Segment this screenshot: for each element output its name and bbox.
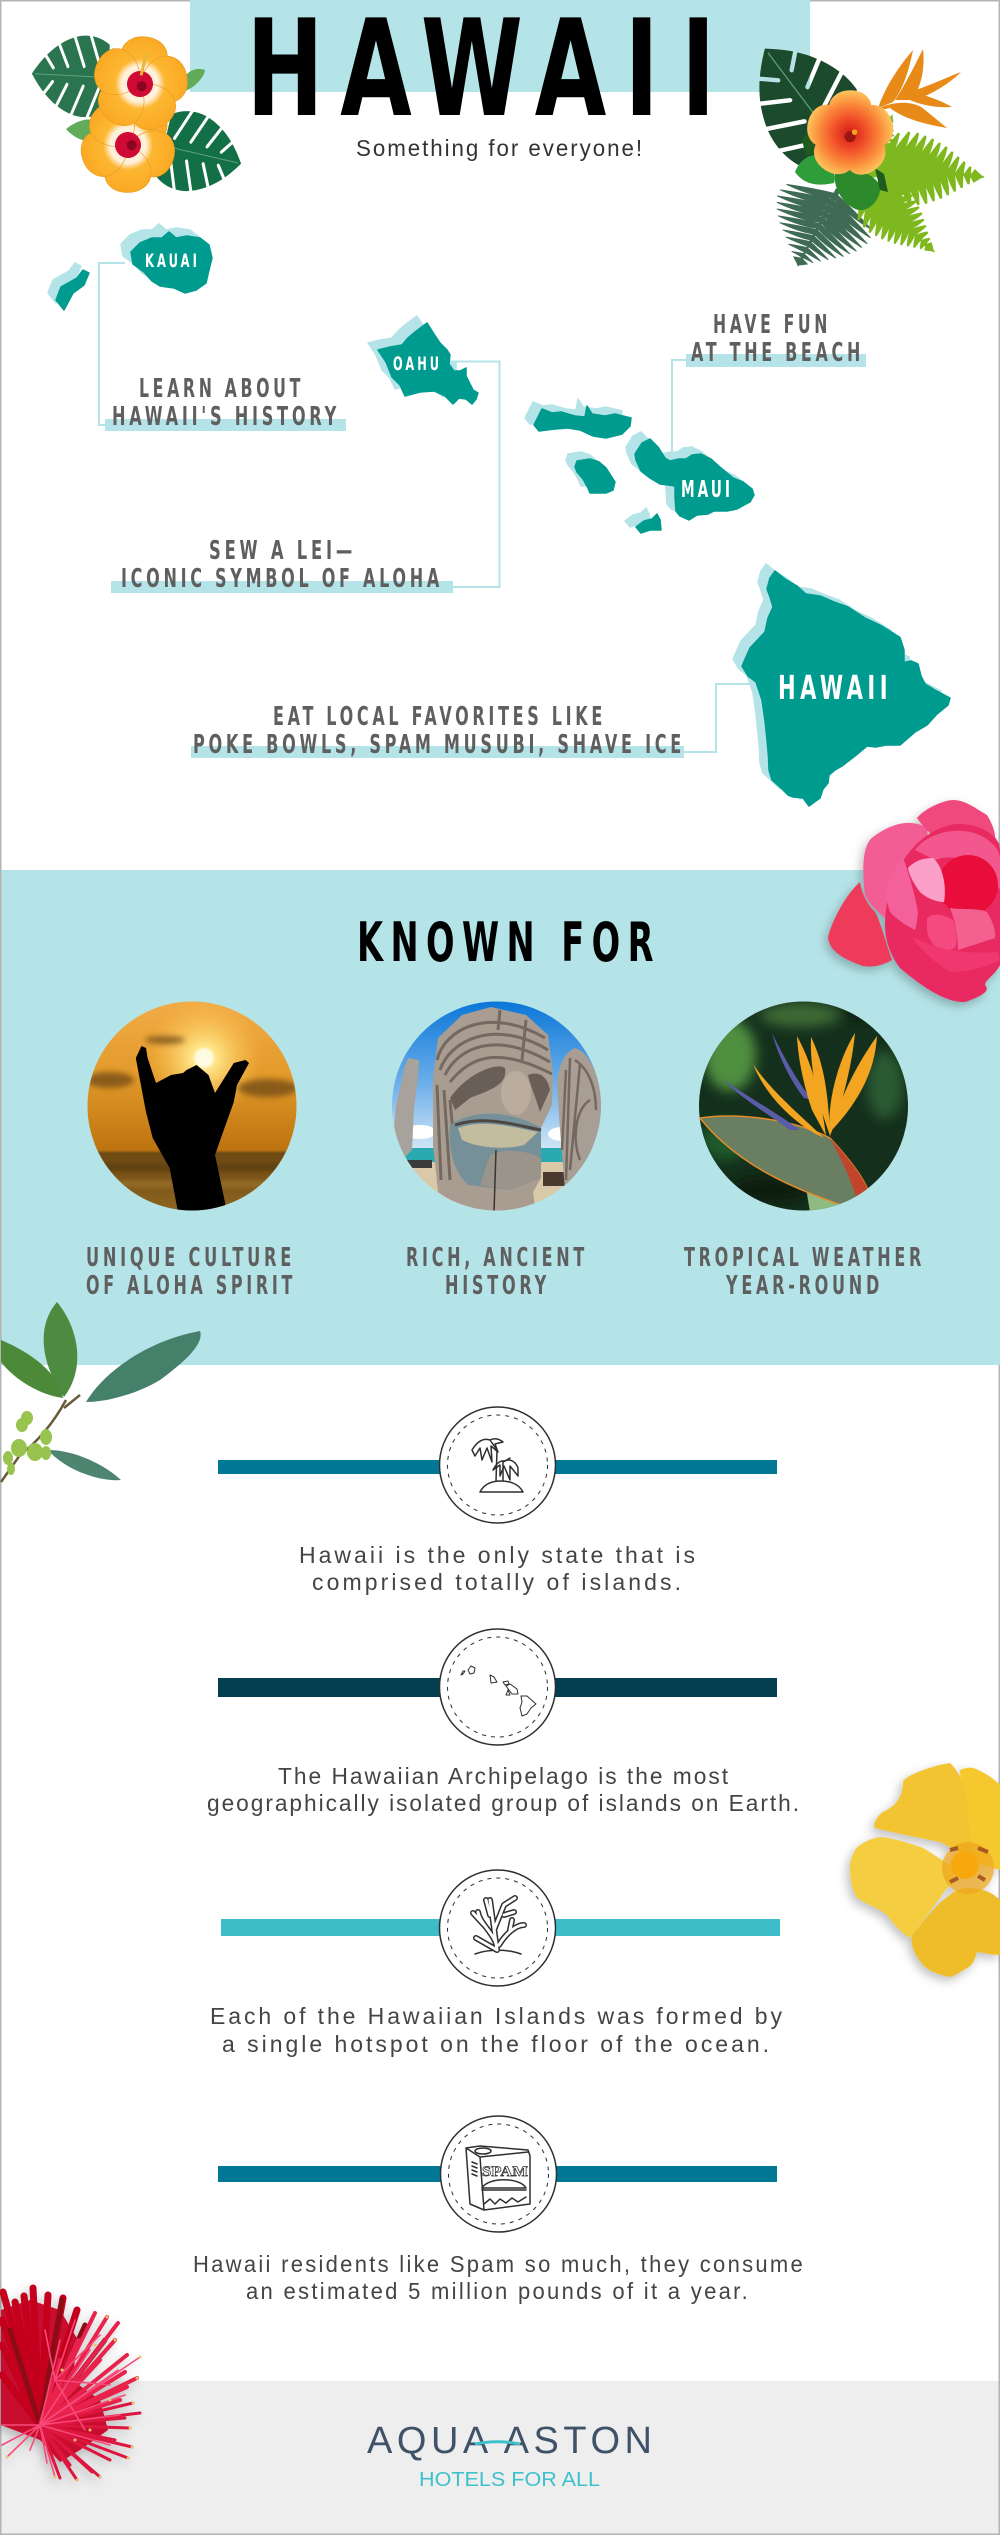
island: Lanai — [566, 452, 615, 493]
island: Kauai — [121, 224, 212, 293]
green fern fronds — [838, 106, 985, 272]
fact text: Each of the Hawaiian Islands was formed by — [210, 2003, 785, 2029]
right tiki — [557, 1048, 602, 1190]
flower: red lehua — [1, 2288, 140, 2480]
sprig stem — [1, 1395, 80, 1482]
photo: shaka hand at sunset — [86, 1000, 298, 1212]
connector: Hawaii to food — [684, 684, 750, 752]
island: Oahu: OAHU — [393, 353, 442, 375]
island: Hawaii big island: HAWAII — [778, 668, 892, 707]
label: ancient history — [406, 1243, 588, 1301]
purple tongues — [724, 1033, 812, 1130]
label: ancient history: HISTORY — [445, 1271, 550, 1301]
footer band — [2, 2381, 998, 2534]
fact text — [207, 1763, 801, 1816]
hibiscus flower lower — [55, 76, 198, 218]
monstera leaf left — [30, 33, 120, 119]
fact text: an estimated 5 million pounds of it a year. — [246, 2278, 750, 2304]
island: Maui — [626, 432, 754, 520]
callout: local food: EAT LOCAL FAVORITES LIKE — [273, 702, 606, 732]
dark fern frond — [753, 166, 883, 289]
icon: spam can — [440, 2116, 556, 2232]
bird of paradise bloom — [872, 49, 961, 128]
callout: beach — [686, 310, 866, 368]
callout: history: HAWAII'S HISTORY — [112, 402, 340, 432]
island: Kahoolawe — [625, 508, 661, 533]
label: tropical weather — [684, 1243, 925, 1301]
fact text: The Hawaiian Archipelago is the most — [278, 1763, 730, 1789]
logo: Aqua Aston: HOTELS FOR ALL — [419, 2469, 600, 2491]
subtitle: Something for everyone! — [356, 135, 644, 161]
hand silhouette — [136, 1046, 249, 1212]
fact text: a single hotspot on the floor of the ocean. — [222, 2031, 772, 2057]
callout: local food: POKE BOWLS, SPAM MUSUBI, SHAVE ICE — [193, 730, 685, 760]
island: Molokai — [525, 399, 631, 438]
callout: beach: AT THE BEACH — [691, 338, 864, 368]
tiki mouth — [450, 1114, 541, 1190]
monstera leaf — [726, 19, 886, 187]
island: Oahu — [368, 316, 478, 404]
bar — [218, 1460, 777, 1474]
heading: known for: KNOWN FOR — [357, 911, 661, 974]
callout: history: LEARN ABOUT — [139, 374, 304, 404]
sprig berries — [3, 1411, 52, 1475]
panel: known for — [2, 870, 1000, 1365]
callout: lei — [111, 536, 453, 594]
bar — [218, 2166, 777, 2182]
photo: carved tiki statues — [392, 1001, 602, 1214]
label: unique culture — [86, 1243, 296, 1301]
icon: island chain — [440, 1629, 556, 1745]
small green leaves — [66, 69, 205, 142]
island: Kauai: KAUAI — [145, 250, 200, 272]
flowers: right bouquet — [726, 19, 985, 289]
logo: Aqua Aston: AQUA ASTON — [367, 2420, 652, 2462]
callout: lei: ICONIC SYMBOL OF ALOHA — [121, 564, 443, 594]
pale leaf — [806, 1192, 848, 1210]
fact text — [193, 2251, 805, 2304]
callout: history — [105, 374, 346, 432]
orange sepals — [753, 1033, 877, 1138]
fact text: Hawaii residents like Spam so much, they consume — [193, 2251, 805, 2277]
header band — [190, 0, 810, 92]
icon: spam can: SPAM — [482, 2164, 528, 2180]
logo: Aqua Aston — [367, 2420, 652, 2491]
connector: Maui to beach — [672, 360, 686, 455]
label: tropical weather: YEAR-ROUND — [725, 1271, 883, 1301]
callout: beach: HAVE FUN — [713, 310, 831, 340]
connector: Kauai to history — [99, 263, 125, 425]
green spathe — [700, 1116, 870, 1212]
connector: Oahu to lei — [450, 362, 500, 587]
flower: yellow hibiscus — [850, 1763, 1000, 1977]
label: ancient history: RICH, ANCIENT — [406, 1243, 588, 1273]
fact text — [210, 2003, 785, 2057]
sprig leaves — [44, 1302, 77, 1397]
fact text: Hawaii is the only state that is — [299, 1542, 698, 1568]
icon: palm island — [440, 1407, 556, 1523]
leaf sprig — [1, 1302, 201, 1482]
callout: lei: SEW A LEI— — [209, 536, 356, 566]
hibiscus flower upper — [81, 30, 199, 143]
fact text: comprised totally of islands. — [312, 1569, 684, 1595]
island: Niihau — [48, 263, 89, 310]
flowers: left hibiscus and monstera cluster — [30, 30, 250, 218]
fact: hotspot — [210, 1870, 785, 2057]
fact: archipelago — [207, 1629, 801, 1816]
flower: pink rose — [828, 800, 1000, 1002]
fact: spam — [193, 2116, 805, 2304]
small tiki — [394, 1058, 419, 1160]
label: unique culture: UNIQUE CULTURE — [86, 1243, 295, 1273]
orange hibiscus — [802, 90, 898, 182]
photo: bird of paradise flower — [699, 1000, 909, 1212]
fact: islands — [218, 1407, 777, 1595]
icon: coral — [440, 1870, 556, 1986]
fact text: geographically isolated group of islands on Earth. — [207, 1790, 801, 1816]
bar — [221, 1919, 780, 1936]
island: Hawaii big island — [733, 564, 950, 806]
broad green leaves — [835, 168, 880, 210]
label: unique culture: OF ALOHA SPIRIT — [86, 1271, 296, 1301]
island: Maui: MAUI — [681, 477, 733, 503]
monstera leaf right — [145, 105, 250, 203]
tiki eyes and nose — [450, 1066, 550, 1112]
main tiki — [433, 1007, 553, 1214]
callout: local food — [191, 702, 685, 760]
island map — [48, 224, 950, 806]
bar — [218, 1678, 777, 1697]
fact text — [299, 1542, 698, 1595]
